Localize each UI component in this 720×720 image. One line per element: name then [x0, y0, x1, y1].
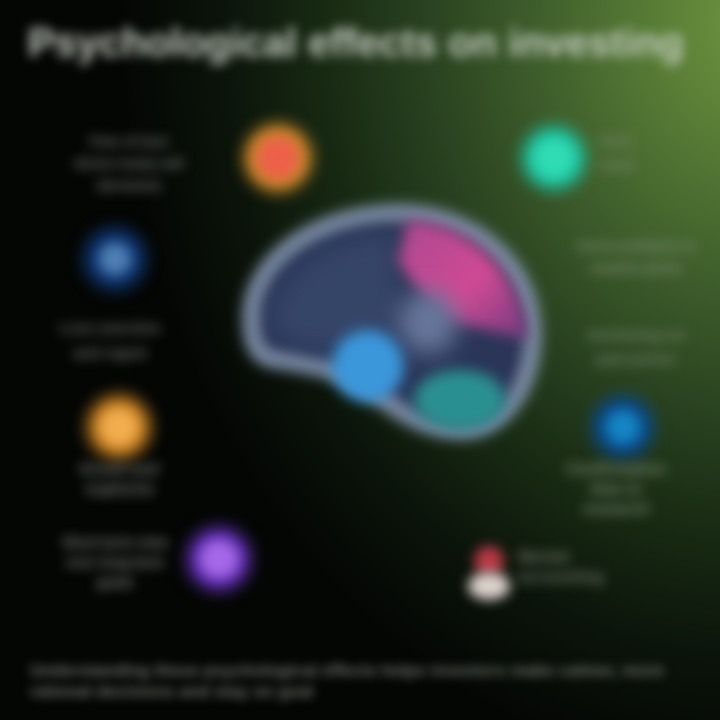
icon: amber circle — [75, 383, 163, 470]
text: top right label: Herd mind — [598, 133, 634, 174]
brain diagram — [232, 194, 552, 450]
title: Psychological effects on investing — [28, 21, 684, 65]
text: right label blue: Confirmation bias in research — [566, 461, 666, 518]
icon: deep blue circle — [582, 386, 664, 467]
brain lobe: teal — [414, 370, 506, 430]
brain outline — [250, 212, 534, 432]
text: right label two: Anchoring on past prices — [587, 327, 685, 368]
icon: purple circle — [176, 516, 262, 602]
icon: red orange circle — [232, 112, 324, 204]
text: left label blue: Loss aversion and regret — [60, 320, 160, 362]
brain lobe: centre — [398, 290, 458, 354]
text: bottom right label: Mental accounting — [518, 549, 603, 586]
text: footer: Understanding these psychological effects helps investors make calmer, more rational decisions and stay on goal — [30, 661, 664, 701]
icon: red and white badge — [460, 538, 518, 610]
text: bottom left label: Short-term view over long-term goals — [62, 534, 168, 590]
icon: teal circle — [512, 116, 596, 200]
text: right label one: Overconfident in market picks — [576, 238, 696, 277]
brain lobe: blue circle — [332, 330, 404, 402]
brain lobe: pink — [398, 220, 528, 340]
text: top left label: Fear of loss drives hasty sell decisions — [75, 133, 183, 193]
text: left label amber: Greed and euphoria — [79, 461, 159, 498]
icon: blue circle — [74, 218, 156, 300]
brain lobe: dark blue — [270, 232, 400, 350]
